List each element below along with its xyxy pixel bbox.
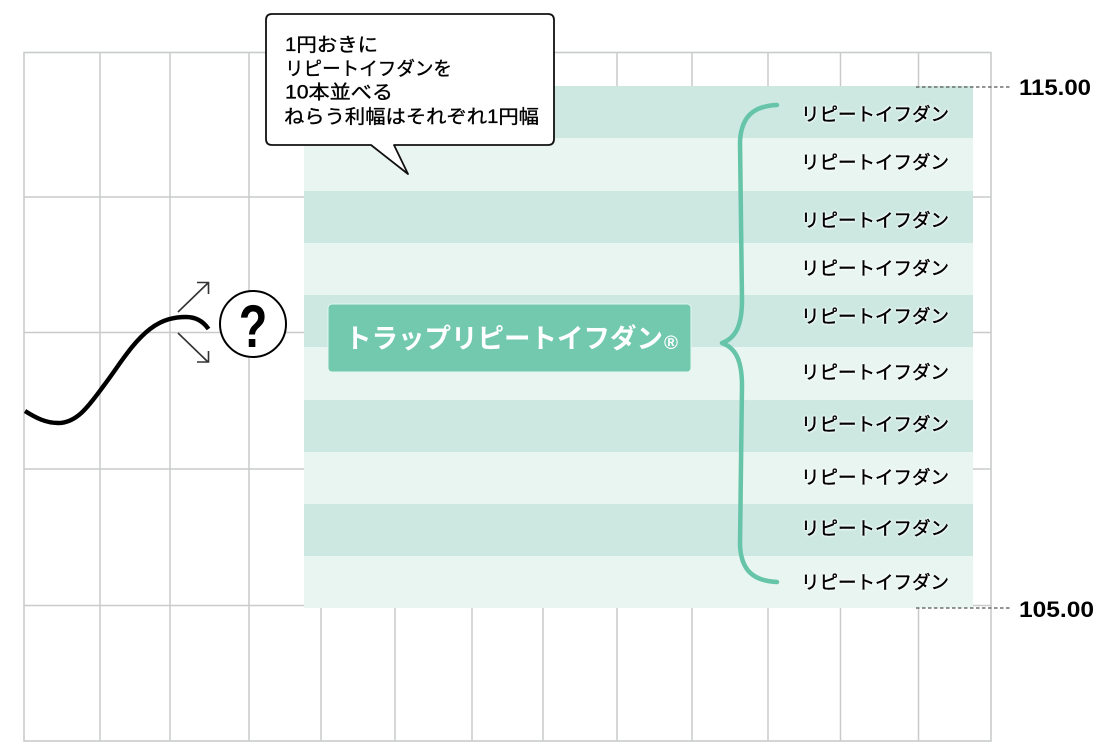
callout: リピートイフダンを [285,58,452,80]
arrow up [178,282,208,312]
callout [266,14,554,174]
repeat order labels: リピートイフダン [801,104,949,125]
repeat order labels: リピートイフダン [801,467,949,488]
repeat order labels: リピートイフダン [801,210,949,231]
repeat order labels: リピートイフダン [801,414,949,435]
price line curve [25,317,208,423]
repeat order labels: リピートイフダン [801,518,949,539]
arrow down [178,333,208,362]
strategy name box: ® [664,333,678,354]
chart grid [24,52,991,741]
question mark icon: ? [239,293,267,360]
lower price marker: 105.00 [1019,597,1094,622]
callout: ねらう利幅はそれぞれ1円幅 [284,106,539,128]
repeat order labels [801,104,949,593]
strategy name box: トラップリピートイフダン [345,323,663,354]
repeat order labels: リピートイフダン [801,572,949,593]
repeat order labels: リピートイフダン [801,152,949,173]
repeat order labels: リピートイフダン [801,306,949,327]
curly brace [722,105,777,582]
upper price marker: 115.00 [1019,75,1091,100]
callout: 10本並べる [285,82,393,104]
repeat order labels: リピートイフダン [801,362,949,383]
repeat order labels: リピートイフダン [801,258,949,279]
strategy name box [328,304,691,372]
callout: 1円おきに [285,35,378,56]
question mark icon [220,291,286,360]
price bands [304,86,973,608]
